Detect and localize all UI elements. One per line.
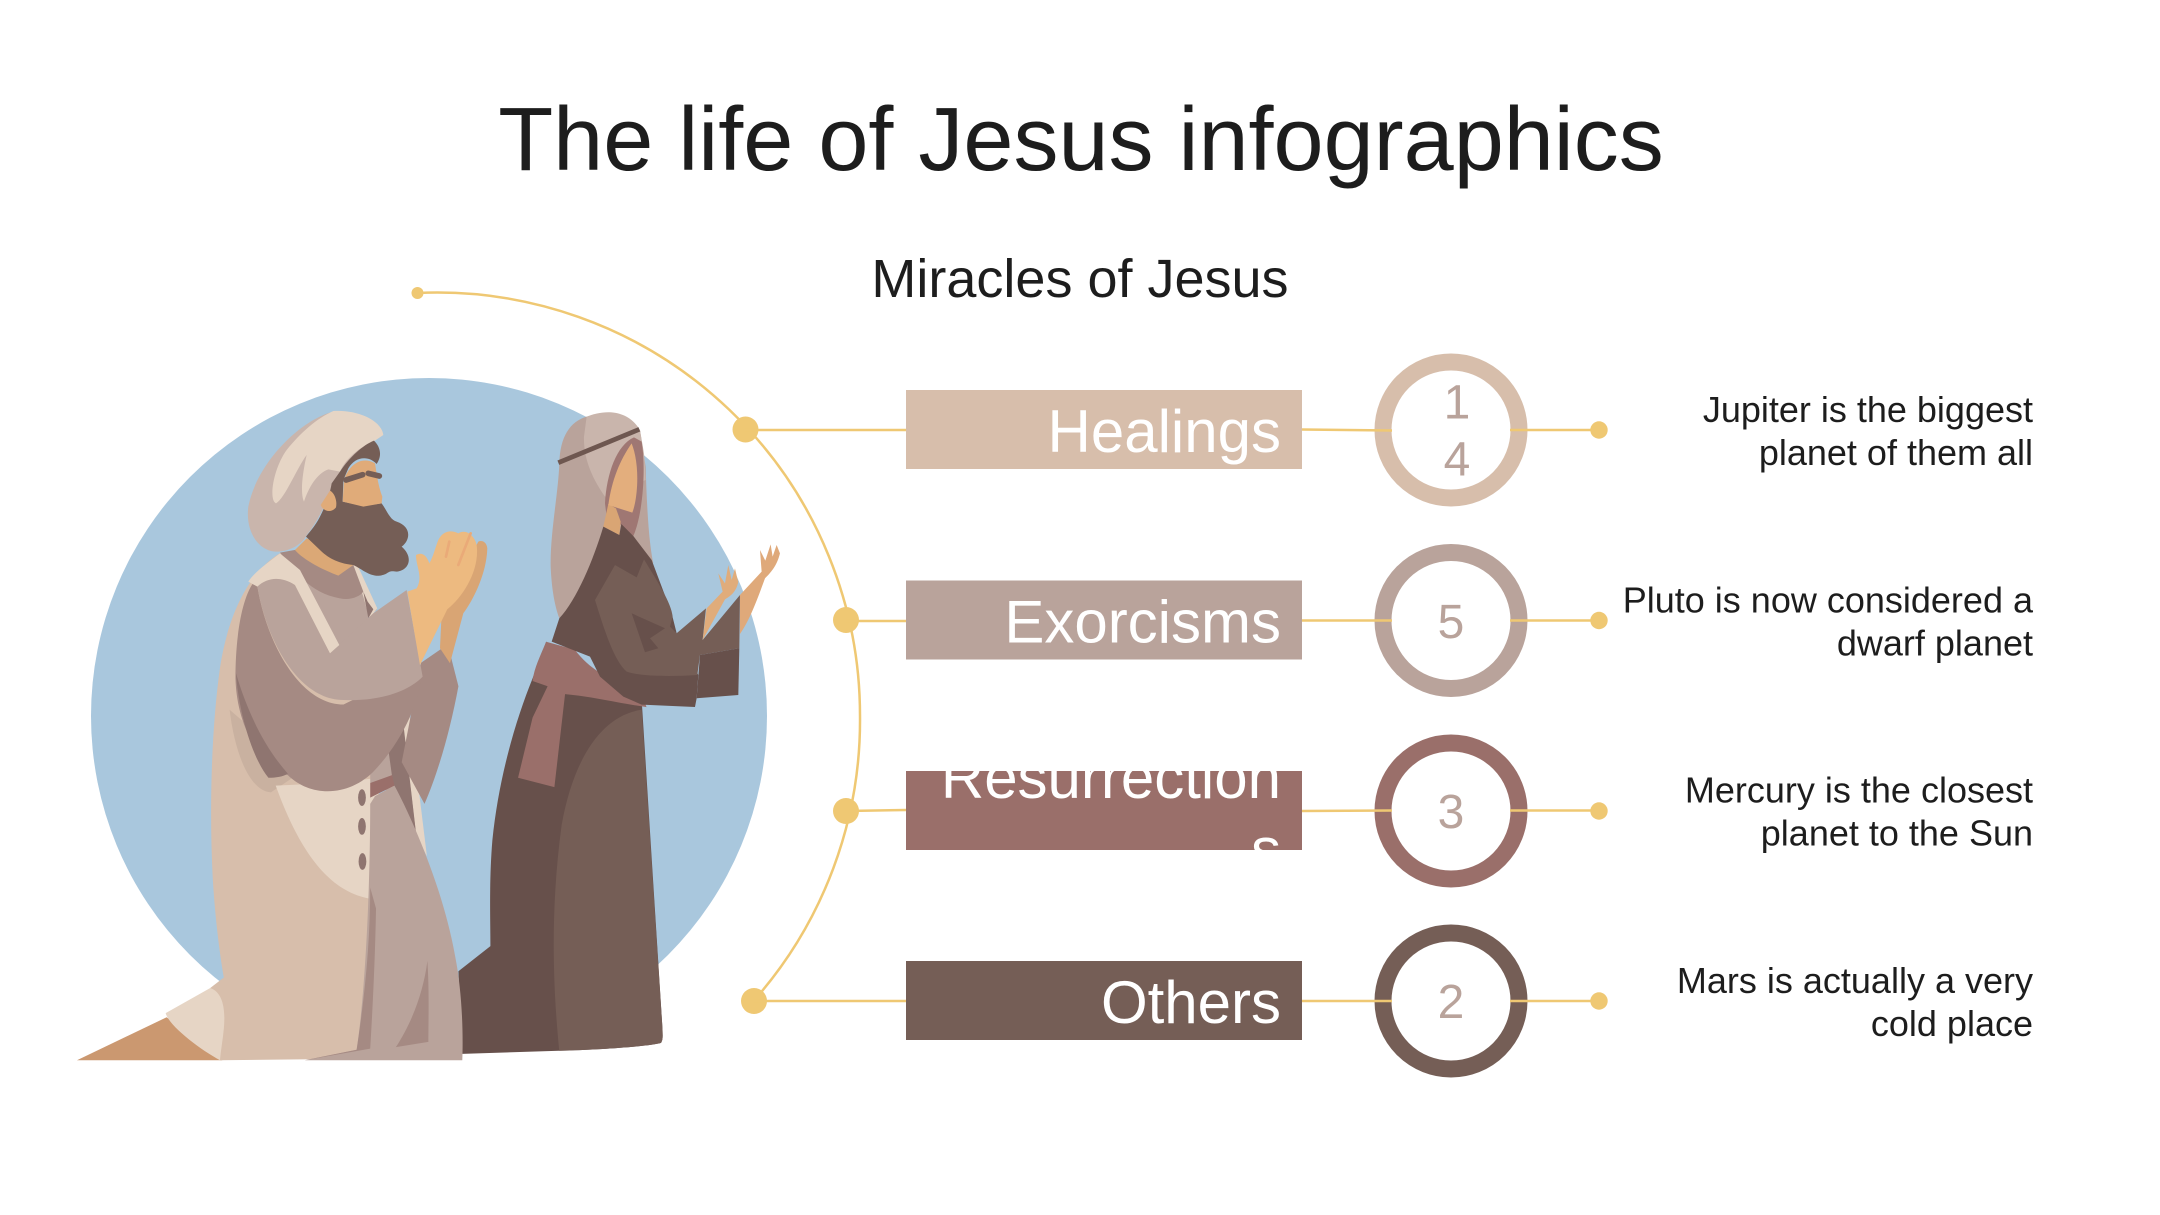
description: Jupiter is the biggest — [1703, 389, 2033, 430]
connector arc with dots — [412, 287, 860, 1014]
description: Mercury is the closest — [1685, 770, 2033, 810]
far hand — [440, 541, 487, 663]
woman lower robe — [458, 642, 663, 1054]
buttons — [358, 789, 366, 806]
ring number 2 — [1383, 933, 1519, 1069]
ring number 5: 5 — [1438, 596, 1464, 649]
ear — [321, 491, 336, 511]
eyebrows — [346, 473, 379, 480]
bar label, clipped overflow: Resurrection — [941, 744, 1281, 811]
dark sleeve drape — [235, 579, 423, 791]
face — [343, 461, 382, 507]
ring number 2: 2 — [1438, 976, 1464, 1029]
near hand — [407, 531, 477, 665]
left connector lines — [745, 430, 906, 1001]
far sleeve — [402, 644, 458, 804]
connector lines to ring and dot — [1302, 421, 1608, 439]
woman left hand — [703, 565, 738, 640]
man lower robe — [77, 553, 463, 1060]
description: planet of them all — [1759, 432, 2033, 473]
turban highlight — [272, 411, 383, 503]
ring number 14 — [1383, 362, 1519, 498]
title: The life of Jesus infographics — [498, 90, 1664, 190]
illustration: woman praying — [458, 412, 780, 1054]
bar: Others — [906, 961, 1302, 1040]
woman upper body — [551, 412, 780, 707]
row 3: Resurrections — [906, 743, 2033, 883]
bar label, clipped overflow: s — [1251, 816, 1281, 883]
bar label: Others — [1101, 969, 1281, 1036]
connector lines to ring and dot — [1302, 802, 1608, 820]
illustration: man kneeling in prayer — [77, 411, 487, 1060]
row 4: Others — [906, 933, 2033, 1069]
ring number 14: 1 — [1444, 376, 1470, 430]
description: planet to the Sun — [1761, 812, 2033, 854]
description: dwarf planet — [1837, 622, 2033, 664]
knee — [166, 988, 224, 1060]
description: Pluto is now considered a — [1623, 580, 2034, 620]
bar: Resurrections — [906, 771, 1302, 850]
connector lines to ring and dot — [1302, 612, 1608, 629]
turban base — [248, 411, 380, 552]
description: Mars is actually a very — [1677, 960, 2033, 1001]
subtitle: Miracles of Jesus — [871, 249, 1289, 309]
bar: Healings — [906, 390, 1302, 469]
description: cold place — [1871, 1003, 2033, 1044]
illustration: blue circle background — [91, 378, 767, 1054]
bar: Exorcisms — [906, 580, 1302, 660]
row 1: Healings — [906, 362, 2033, 498]
ring number 14: 4 — [1444, 434, 1470, 486]
cream shoulder band — [248, 553, 339, 653]
bar label: Healings — [1048, 398, 1281, 465]
row 2: Exorcisms — [906, 552, 2034, 688]
neck — [295, 538, 353, 576]
ring number 3: 3 — [1438, 786, 1464, 839]
bar label: Exorcisms — [1004, 588, 1281, 656]
hair and beard — [306, 441, 409, 576]
man head, arm and hands — [248, 411, 487, 700]
ring number 3 — [1383, 743, 1519, 879]
sleeve light — [256, 576, 423, 700]
chest — [300, 563, 377, 660]
collar — [280, 547, 363, 599]
ground — [77, 1017, 222, 1060]
connector lines to ring and dot — [1302, 992, 1608, 1010]
ring number 5 — [1383, 552, 1519, 688]
bar label, clipped overflow — [946, 771, 1278, 850]
woman right hand — [740, 544, 780, 634]
